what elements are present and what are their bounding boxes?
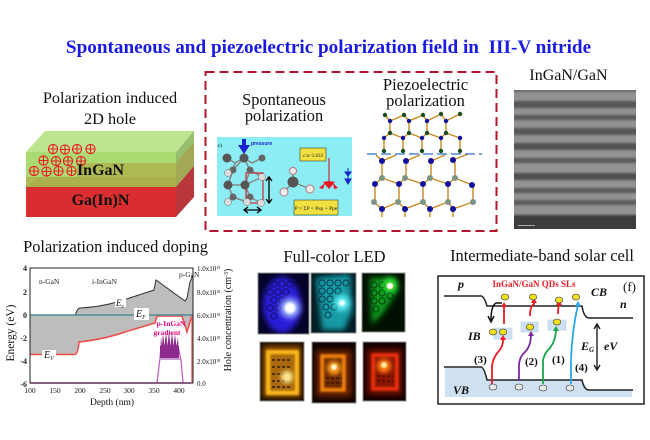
holes: [489, 384, 574, 391]
energy gap arrow: [594, 324, 600, 370]
x axis numbers: 300: [123, 386, 135, 395]
x axis numbers: 100: [24, 386, 36, 395]
axes frame: [30, 268, 193, 383]
valence band edge: [30, 315, 192, 354]
band labels: n: [620, 297, 627, 311]
right axis numbers: 18: [216, 358, 220, 363]
title: Spontaneous and piezoelectric polarization field in III-V nitride: [66, 37, 592, 58]
x axis numbers: 250: [99, 386, 111, 395]
crystal atoms and bonds: [222, 154, 266, 206]
band labels: VB: [453, 383, 469, 397]
heading: spontaneous polarization: polarization: [245, 106, 323, 125]
LED photo: green: [362, 273, 405, 332]
band labels: V: [50, 356, 55, 362]
heading: piezoelectric polarization: Piezoelectric: [383, 75, 468, 94]
TEM micrograph of quantum well stripes: [510, 88, 640, 231]
grey band gap area: [30, 275, 193, 354]
band labels: CB: [591, 285, 607, 299]
LED photo: cyan: [311, 273, 356, 333]
LED photo: amber: [260, 342, 304, 401]
transition numbers: (2): [525, 356, 538, 368]
region labels: p-GaN: [179, 270, 200, 279]
x axis numbers: 350: [148, 386, 160, 395]
left axis numbers: -4: [20, 357, 27, 366]
right axis numbers: 19: [216, 265, 220, 270]
left axis numbers: 4: [23, 264, 27, 273]
left axis title: Energy (eV): [5, 304, 17, 361]
region labels: [39, 270, 200, 286]
band labels: eV: [604, 339, 618, 353]
gradient label: gradient: [153, 328, 181, 337]
recombination arrow: [488, 303, 502, 322]
x axis numbers: [24, 386, 185, 395]
band labels: IB: [467, 329, 481, 343]
transition arrows: [492, 300, 578, 384]
x axis numbers: 400: [173, 386, 185, 395]
valence band shading: [445, 368, 632, 397]
panel: piezoelectric polarization lattice: [367, 112, 482, 217]
transition numbers: (4): [575, 362, 588, 374]
left axis numbers: [20, 264, 27, 389]
hole concentration curve: [157, 346, 183, 383]
right axis numbers: 2.0x10: [197, 358, 216, 366]
right axis numbers: [197, 265, 220, 388]
band labels: [453, 277, 627, 397]
LED photo: orange: [312, 342, 356, 403]
band labels: F: [141, 315, 146, 321]
band labels: [42, 298, 149, 362]
arrowheads: [500, 298, 581, 340]
right axis numbers: 4.0x10: [197, 335, 216, 343]
x axis numbers: 200: [74, 386, 86, 395]
total polarization formula box: P = ΣP = Psp + Ppe: [295, 206, 338, 212]
LED photo: red: [363, 342, 406, 401]
lattice dimension arrows: [244, 177, 272, 213]
right axis numbers: 6.0x10: [197, 312, 216, 320]
band labels: p: [457, 277, 464, 291]
transition numbers: [474, 354, 588, 374]
heading: piezoelectric polarization: polarization: [386, 91, 465, 110]
heading: full-color LED: Full-color LED: [283, 247, 386, 266]
heading: intermediate-band solar cell: Intermediate-band solar cell: [450, 246, 634, 265]
right axis title: -3: [224, 272, 230, 277]
panel: spontaneous polarization crystal diagram: [217, 137, 352, 216]
heading: polarization induced 2D hole: Polarization induced: [43, 88, 177, 107]
right axis title: Hole concentration (cm: [223, 277, 234, 371]
layer label: InGaN: InGaN: [77, 162, 125, 179]
band labels: G: [589, 346, 594, 354]
panel: layered InGaN on GaN block: [26, 131, 194, 217]
holes: plus signs in circles: [29, 144, 95, 176]
region labels: i-InGaN: [92, 277, 118, 286]
left axis numbers: 2: [23, 288, 27, 297]
polarization vectors: [328, 158, 330, 182]
right axis title: ): [223, 269, 234, 272]
right axis numbers: 1.0x10: [197, 265, 216, 273]
LED photo: blue: [258, 273, 309, 334]
transition numbers: (1): [552, 354, 565, 366]
region labels: n-GaN: [39, 277, 60, 286]
band labels: E: [136, 309, 142, 320]
x axis numbers: 150: [49, 386, 61, 395]
right axis numbers: 0.0: [197, 380, 206, 388]
panel letter: (f): [623, 279, 636, 294]
right axis numbers: 18: [216, 289, 220, 294]
heading: polarization induced 2D hole: 2D hole: [84, 109, 136, 128]
right axis numbers: 18: [216, 335, 220, 340]
heading: spontaneous polarization: Spontaneous: [242, 90, 326, 109]
band edges: [444, 296, 633, 390]
panel: band diagram: [438, 276, 644, 404]
Fermi level: [30, 314, 193, 316]
heading: InGaN/GaN: InGaN/GaN: [529, 67, 608, 84]
heading: polarization induced doping: Polarization induced doping: [23, 237, 208, 256]
gradient label: p-InGaN: [157, 319, 186, 328]
tetrahedron atoms: [280, 168, 314, 196]
transition numbers: (3): [474, 354, 487, 366]
left axis numbers: -6: [20, 380, 27, 389]
chart: energy band and hole concentration: [5, 264, 234, 408]
band labels: E: [44, 350, 50, 361]
left axis numbers: 0: [23, 311, 27, 320]
quantum dot boxes: [494, 320, 566, 339]
left axis numbers: -2: [20, 334, 27, 343]
layer label: Ga(In)N: Ga(In)N: [72, 192, 130, 209]
band labels: E: [581, 339, 589, 353]
right axis numbers: 18: [216, 312, 220, 317]
electrons: [489, 294, 580, 335]
conduction band edge: [75, 275, 193, 315]
pressure arrow: pressure: [251, 141, 272, 147]
label: quantum dot superlattice: InGaN/GaN QDs SLs: [492, 279, 576, 289]
dashed red callout frame: [206, 72, 496, 231]
ratio formula box: c/a<1.633: [303, 154, 323, 159]
band labels: E: [116, 298, 122, 308]
hole oscillation peaks: [160, 331, 179, 358]
LED photo borders: [258, 273, 406, 403]
x axis title: Depth (nm): [90, 397, 134, 408]
right axis numbers: 8.0x10: [197, 289, 216, 297]
band labels: c: [122, 304, 124, 310]
panel: spontaneous polarization crystal diagram: c): [218, 144, 222, 149]
